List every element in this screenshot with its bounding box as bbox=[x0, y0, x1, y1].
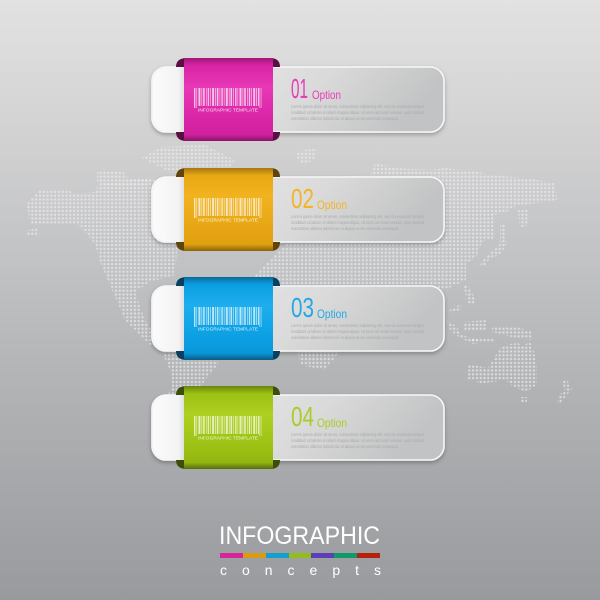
card 2 barcode: INFOGRAPHIC TEMPLATE bbox=[198, 218, 258, 224]
card 2 bbox=[152, 168, 444, 251]
card 4 ribbon bbox=[176, 386, 280, 469]
japan and korea bbox=[480, 224, 508, 266]
dotted world map bbox=[27, 145, 572, 404]
north america bbox=[27, 178, 190, 352]
card 3 description: exercitation ullamco laboris nisi ut aliquip ex ea commodo consequat. bbox=[291, 335, 399, 340]
card 1 body bbox=[152, 67, 444, 132]
card 1 barcode: INFOGRAPHIC TEMPLATE bbox=[198, 108, 258, 114]
card 1 description: incididunt ut labore et dolore magna aliqua. Ut enim ad minim veniam, quis nostrud bbox=[291, 110, 424, 115]
south america bbox=[162, 352, 218, 400]
card 3 description: Lorem ipsum dolor sit amet, consectetur adipiscing elit, sed do eiusmod tempor bbox=[291, 323, 424, 328]
footer subtitle: concepts bbox=[220, 562, 381, 578]
card 1 number: 01 bbox=[291, 73, 308, 104]
australia bbox=[467, 342, 537, 392]
card 2 barcode bbox=[194, 208, 262, 224]
card 2 description bbox=[291, 214, 424, 231]
card 3 ribbon bbox=[176, 277, 280, 360]
card 1 description: Lorem ipsum dolor sit amet, consectetur adipiscing elit, sed do eiusmod tempor bbox=[291, 104, 424, 109]
card 4 description: incididunt ut labore et dolore magna aliqua. Ut enim ad minim veniam, quis nostrud bbox=[291, 438, 424, 443]
iceland bbox=[295, 148, 317, 165]
card 4 description bbox=[291, 432, 424, 449]
card 2 description: incididunt ut labore et dolore magna aliqua. Ut enim ad minim veniam, quis nostrud bbox=[291, 220, 424, 225]
card 3 description bbox=[291, 323, 424, 340]
card 4 heading: Option bbox=[317, 416, 347, 430]
aleutians bbox=[27, 227, 38, 236]
eurasia and africa bbox=[255, 163, 557, 370]
colour strip bbox=[220, 553, 380, 558]
card 3 barcode bbox=[194, 317, 262, 332]
footer title: INFOGRAPHIC bbox=[219, 522, 380, 550]
card 2 number: 02 bbox=[291, 183, 314, 214]
india and malay peninsula bbox=[463, 284, 476, 305]
card 2 description: exercitation ullamco laboris nisi ut aliquip ex ea commodo consequat. bbox=[291, 226, 399, 231]
card 2 description: Lorem ipsum dolor sit amet, consectetur adipiscing elit, sed do eiusmod tempor bbox=[291, 214, 424, 219]
card 1 description: exercitation ullamco laboris nisi ut aliquip ex ea commodo consequat. bbox=[291, 116, 399, 121]
card 4 barcode bbox=[194, 426, 262, 442]
card 4 number: 04 bbox=[291, 401, 314, 432]
card 4 bbox=[152, 386, 444, 469]
card 4 barcode: INFOGRAPHIC TEMPLATE bbox=[198, 436, 258, 442]
card 2 body bbox=[152, 177, 444, 242]
card 4 description: Lorem ipsum dolor sit amet, consectetur adipiscing elit, sed do eiusmod tempor bbox=[291, 432, 424, 437]
card 3 number: 03 bbox=[291, 292, 314, 323]
indonesia bbox=[447, 320, 478, 345]
card 2 heading: Option bbox=[317, 198, 347, 212]
card 1 ribbon bbox=[176, 58, 280, 141]
card 3 description: incididunt ut labore et dolore magna aliqua. Ut enim ad minim veniam, quis nostrud bbox=[291, 329, 424, 334]
greenland bbox=[142, 145, 235, 176]
card 4 description: exercitation ullamco laboris nisi ut aliquip ex ea commodo consequat. bbox=[291, 444, 399, 449]
arctic islands bbox=[97, 170, 150, 186]
card 3 bbox=[152, 277, 444, 360]
card 2 ribbon bbox=[176, 168, 280, 251]
card 3 heading: Option bbox=[317, 307, 347, 321]
card 1 bbox=[152, 58, 444, 141]
card 1 barcode bbox=[194, 98, 262, 114]
tasmania and new zealand bbox=[521, 397, 527, 403]
card 3 body bbox=[152, 286, 444, 351]
kamchatka bbox=[518, 210, 528, 228]
card 1 heading: Option bbox=[312, 88, 341, 102]
card 3 barcode: INFOGRAPHIC TEMPLATE bbox=[198, 326, 258, 332]
card 1 description bbox=[291, 104, 424, 121]
card 4 body bbox=[152, 395, 444, 460]
